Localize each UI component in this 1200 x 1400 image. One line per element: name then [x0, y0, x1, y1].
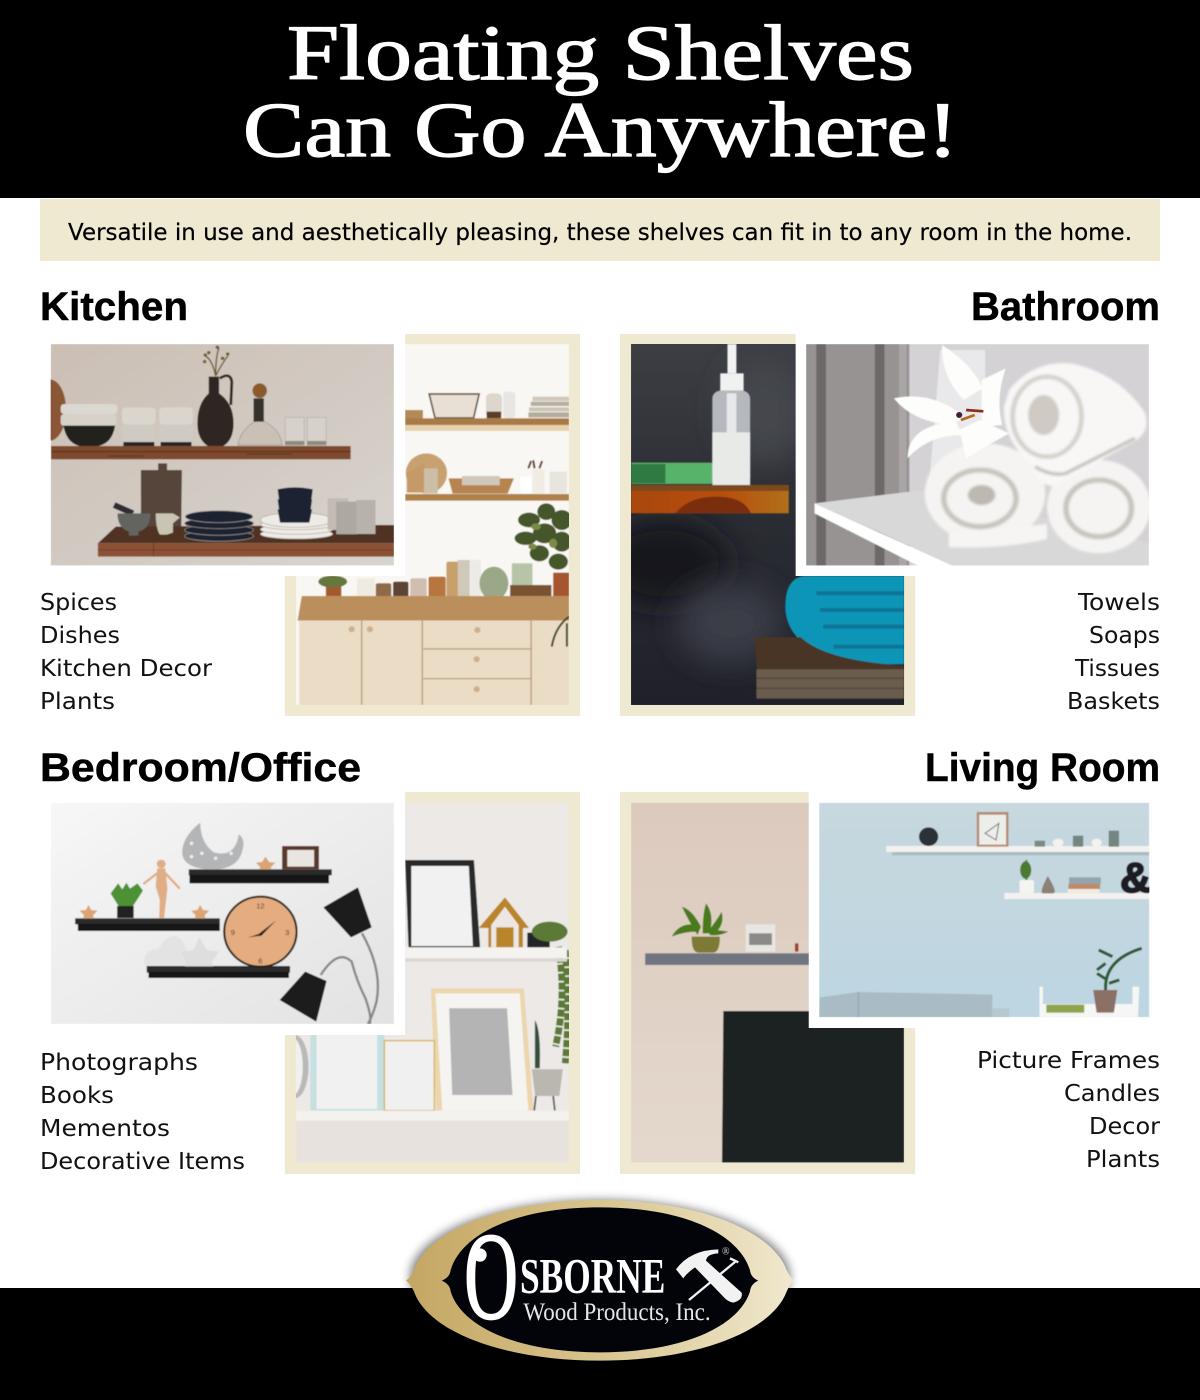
title: Floating Shelves [287, 9, 914, 96]
footer band [0, 1288, 1200, 1400]
logo: Osborne Wood Products [406, 1200, 794, 1361]
photo: black shelves with clock and lamp: 9 [231, 928, 235, 937]
list: kitchen items: Dishes [40, 621, 120, 649]
white overlap mask [281, 330, 405, 576]
living room photo collage [620, 790, 1151, 1174]
photo: dark wall with soap and blue towel [631, 344, 904, 705]
photo: black shelves with clock and lamp: 3 [285, 928, 289, 937]
list: kitchen items [40, 588, 212, 715]
list: bedroom items: Decorative Items [40, 1147, 245, 1175]
white overlap mask [809, 790, 930, 1028]
list: kitchen items: Plants [40, 687, 115, 715]
white overlap mask [281, 790, 405, 1035]
heading: bathroom: Bathroom [971, 285, 1160, 329]
logo gold frame [406, 1200, 794, 1361]
logo wordmark: SBORNE [520, 1248, 665, 1304]
list: bedroom items [40, 1048, 245, 1175]
list: bathroom items [1067, 588, 1160, 715]
list: living room items: Plants [1086, 1145, 1160, 1173]
intro strip [40, 199, 1160, 261]
heading: bedroom office: Bedroom/Office [40, 746, 361, 790]
photo: rolled white towels with lily [806, 344, 1150, 566]
list: bathroom items: Tissues [1074, 654, 1160, 682]
white overlap mask [796, 330, 930, 576]
title [243, 9, 958, 173]
list: living room items [977, 1046, 1160, 1173]
bedroom photo collage [51, 790, 580, 1174]
panel: bathroom [599, 285, 1160, 716]
heading: kitchen: Kitchen [40, 285, 188, 329]
list: kitchen items: Spices [40, 588, 117, 616]
logo black oval [442, 1207, 758, 1352]
list: bathroom items: Soaps [1089, 621, 1160, 649]
list: bedroom items: Mementos [40, 1114, 170, 1142]
photo: kitchen counter and shelves [296, 344, 572, 705]
photo: white shelves with picture frames [281, 803, 569, 1163]
photo: blue wall with white shelves: & [1120, 855, 1151, 901]
photo: black shelves with clock and lamp: 6 [258, 956, 263, 965]
list: bedroom items: Photographs [40, 1048, 198, 1076]
heading: living room: Living Room [925, 746, 1160, 790]
panel: kitchen [33, 285, 580, 716]
photo: grey shelf above television [631, 803, 904, 1163]
logo wordmark: ® [722, 1247, 730, 1258]
title: Can Go Anywhere! [243, 86, 958, 173]
list: living room items: Picture Frames [977, 1046, 1160, 1074]
panel: living room [620, 746, 1160, 1174]
photo: rustic wood shelves with dishes [33, 344, 394, 566]
photo: black shelves with clock and lamp [51, 803, 394, 1024]
list: bedroom items: Books [40, 1081, 114, 1109]
header band [0, 0, 1200, 198]
photo: blue wall with white shelves [819, 803, 1151, 1017]
kitchen photo collage [33, 330, 580, 716]
logo wordmark: Wood Products, Inc. [523, 1298, 711, 1326]
panel: bedroom office [40, 746, 580, 1175]
list: living room items: Decor [1089, 1112, 1160, 1140]
list: living room items: Candles [1064, 1079, 1160, 1107]
photo: black shelves with clock and lamp: 12 [256, 901, 265, 910]
icon: hammer and nail [676, 1249, 742, 1303]
logo wordmark [464, 1208, 730, 1346]
logo wordmark: O [464, 1208, 518, 1346]
list: bathroom items: Baskets [1067, 687, 1160, 715]
intro strip: Versatile in use and aesthetically pleasing, these shelves can fit in to any room in the home. [68, 218, 1132, 246]
bathroom photo collage [599, 330, 1150, 716]
list: bathroom items: Towels [1077, 588, 1160, 616]
list: kitchen items: Kitchen Decor [40, 654, 212, 682]
